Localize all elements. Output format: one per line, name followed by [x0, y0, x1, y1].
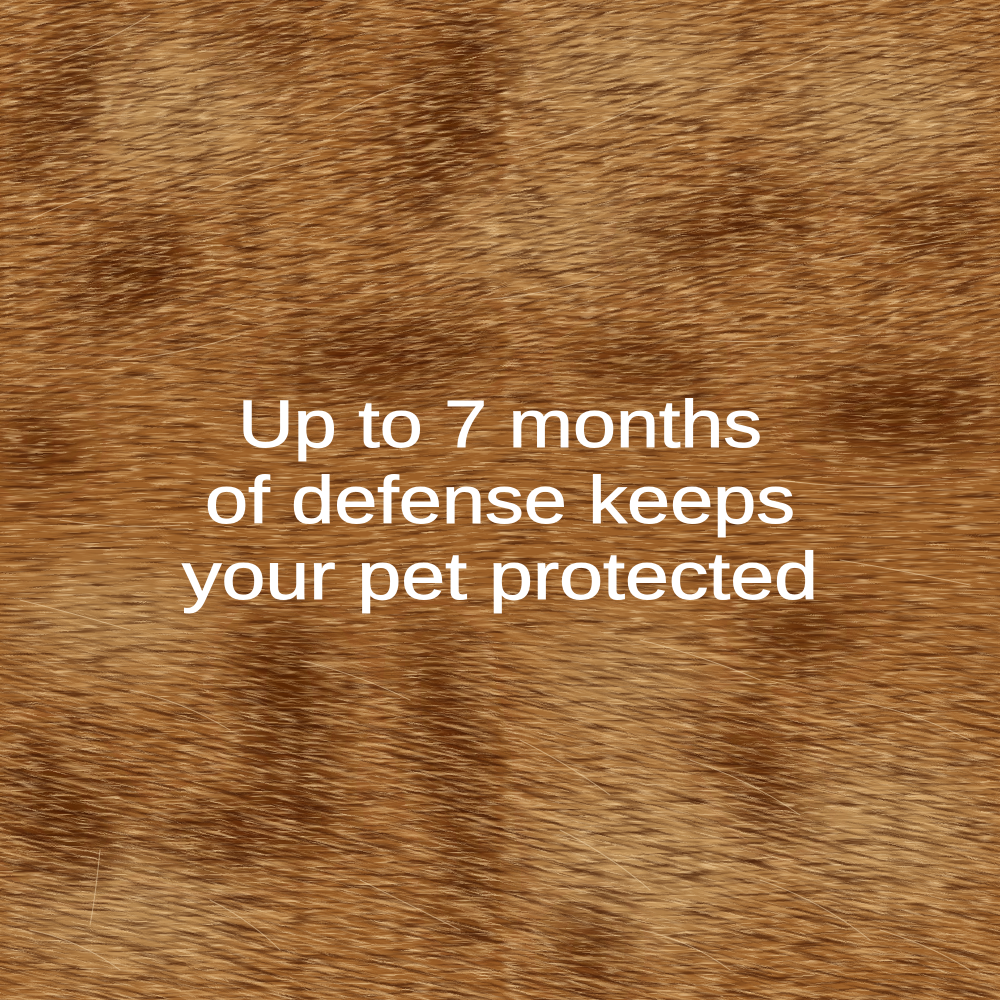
headline line 3: your pet protected [182, 539, 818, 614]
headline line 2: of defense keeps [205, 463, 795, 538]
headline [182, 387, 818, 614]
headline line 1: Up to 7 months [238, 387, 762, 462]
